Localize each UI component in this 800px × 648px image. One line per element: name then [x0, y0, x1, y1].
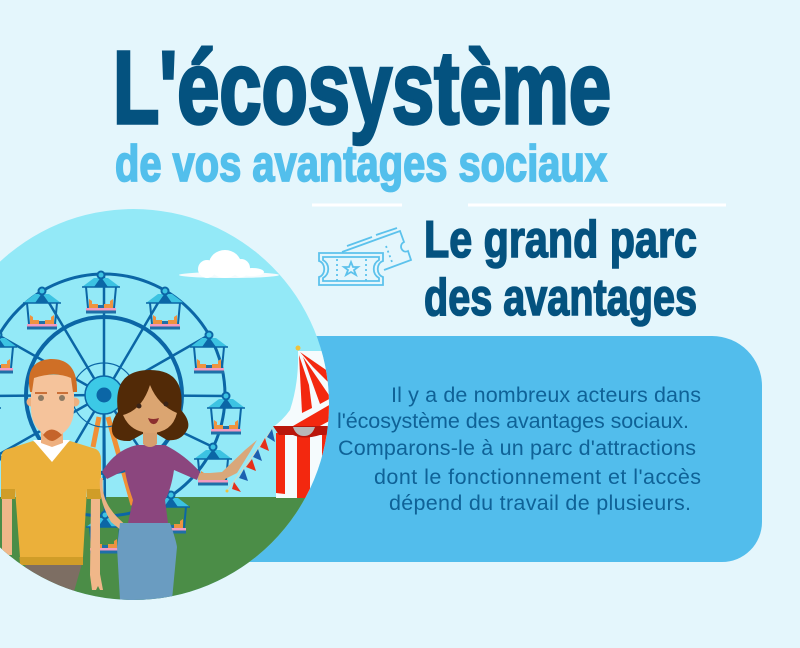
subtitle: de vos avantages sociaux [115, 135, 607, 192]
icon: tickets [319, 228, 411, 285]
cloud [179, 250, 279, 278]
section heading [424, 211, 697, 327]
illustration: amusement park circle [0, 205, 340, 610]
section heading: des avantages [424, 269, 697, 327]
intro text: l'écosystème des avantages sociaux. [337, 409, 689, 433]
woman [100, 370, 257, 600]
intro text: Il y a de nombreux acteurs dans [391, 383, 701, 407]
man [1, 359, 103, 610]
ferris wheel [0, 272, 245, 554]
intro text: dépend du travail de plusieurs. [389, 491, 691, 515]
intro text [337, 383, 701, 515]
section heading: Le grand parc [424, 211, 697, 269]
panel: intro text background [200, 336, 762, 562]
main title: L'écosystème [113, 30, 611, 145]
intro text: dont le fonctionnement et l'accès [374, 465, 701, 489]
circus tent [273, 346, 335, 498]
bunting flags [226, 428, 275, 492]
intro text: Comparons-le à un parc d'attractions [338, 436, 696, 460]
